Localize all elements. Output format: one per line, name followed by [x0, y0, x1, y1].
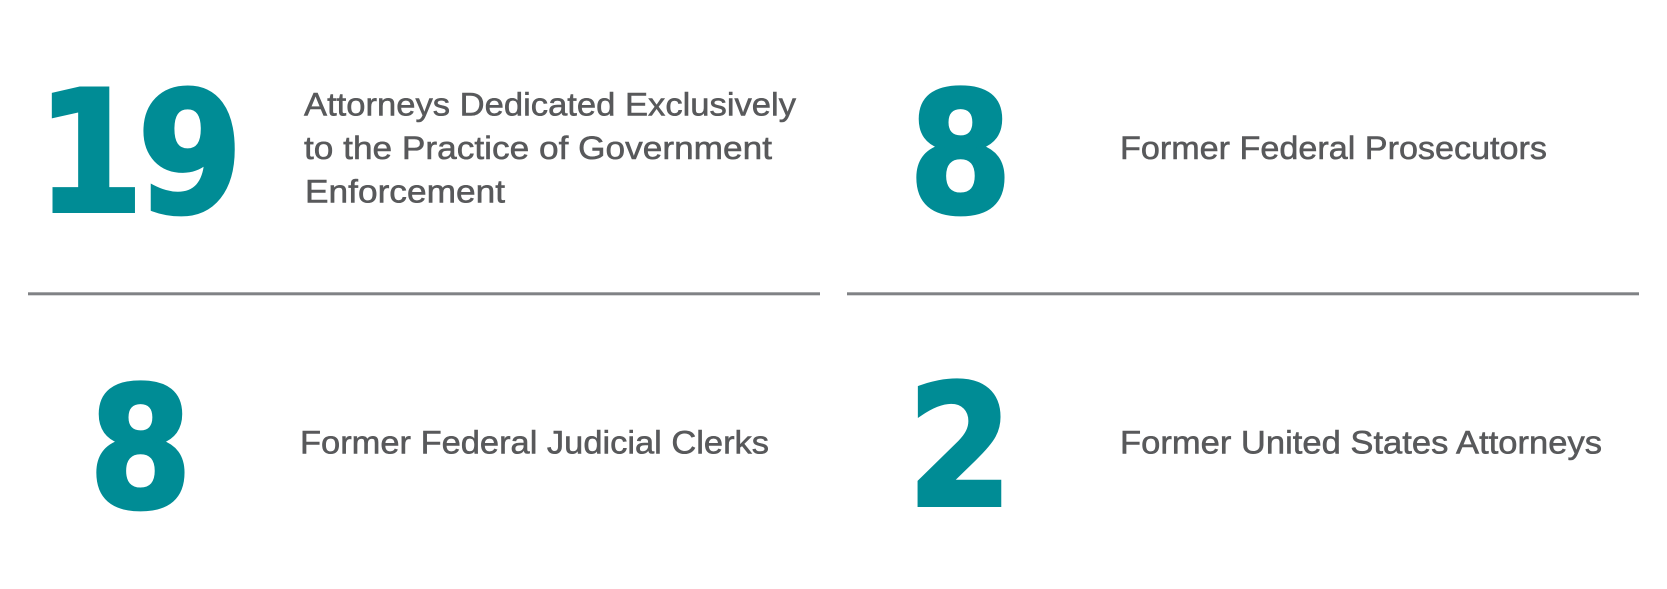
number: 19: 9	[137, 56, 243, 252]
number: 8: 8	[909, 57, 1012, 252]
text block: attorneys dedicated description: Attorneys Dedicated Exclusively	[304, 86, 797, 122]
text block: attorneys dedicated description: Enforcement	[305, 174, 505, 210]
text block: former federal prosecutors: Former Federal Prosecutors	[1120, 130, 1547, 166]
number: 2: 2	[907, 349, 1013, 545]
text block: former united states attorneys: Former United States Attorneys	[1120, 424, 1602, 460]
panel: 2 former united states attorneys	[907, 349, 1602, 545]
panel: 8 former federal prosecutors	[909, 57, 1547, 252]
number: 19	[36, 56, 243, 252]
text block: attorneys dedicated description: to the Practice of Government	[304, 130, 772, 166]
number: 8: 8	[89, 352, 192, 547]
text block: former federal judicial clerks: Former Federal Judicial Clerks	[300, 424, 769, 460]
panel: 19 attorneys dedicated to government enforcement	[36, 56, 797, 252]
number: 19: 1	[36, 56, 144, 252]
panel: 8 former federal judicial clerks	[89, 352, 769, 547]
text block: attorneys dedicated description	[304, 86, 797, 210]
